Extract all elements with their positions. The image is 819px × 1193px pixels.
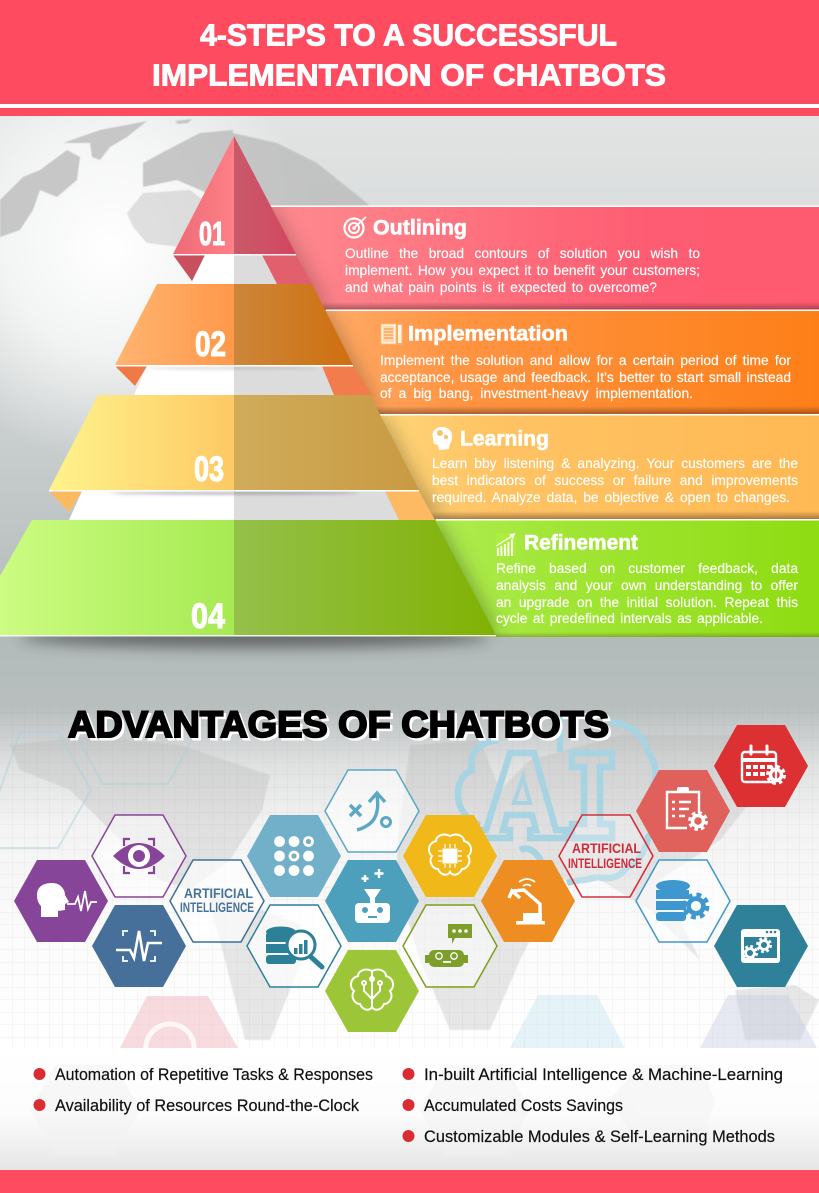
icon: artificial intelligence blue hexagon: INTELLIGENCE	[180, 899, 254, 915]
list item: Accumulated Costs Savings	[424, 1096, 623, 1115]
list item: Availability of Resources Round-the-Clock	[55, 1096, 359, 1115]
tier 03	[49, 395, 419, 492]
tier 02	[115, 284, 353, 366]
icon: data magnifier	[247, 905, 341, 987]
list item: In-built Artificial Intelligence & Machine-Learning	[424, 1065, 783, 1084]
panel: step 4 refinement	[390, 519, 819, 637]
list item: Automation of Repetitive Tasks & Responses	[55, 1065, 373, 1084]
heading: outlining: Outlining	[373, 216, 467, 240]
tier 01: 01	[199, 215, 225, 252]
chart: pyramid	[0, 136, 496, 648]
icon: artificial intelligence red hexagon: INTELLIGENCE	[568, 855, 642, 871]
icon: notebook and pencil	[380, 323, 403, 345]
icon: robot arm	[481, 860, 575, 942]
panel: step 1 outlining	[240, 206, 819, 310]
panel: advantages list	[0, 1048, 819, 1170]
title: 4-STEPS TO A SUCCESSFUL	[200, 18, 617, 52]
tier 04: 04	[191, 597, 225, 636]
text: refinement description: Refine based on customer feedback, data	[496, 561, 798, 576]
background: world map and grid section	[0, 640, 819, 1072]
icon: eye	[92, 815, 186, 897]
text: learning description: best indicators of success or failure and improvements	[432, 473, 798, 488]
text: refinement description: analysis and your own understanding to offer	[496, 578, 798, 593]
text: outlining description	[345, 245, 705, 300]
icon: strategy play	[325, 770, 419, 852]
list item: Customizable Modules & Self-Learning Methods	[424, 1127, 775, 1146]
heading: advantages of chatbots: ADVANTAGES OF CHATBOTS	[70, 706, 612, 748]
text: implementation description: Implement the solution and allow for a certain period of time for	[380, 353, 791, 368]
text: outlining description: Outline the broad contours of solution you wish to	[345, 246, 700, 261]
hexagon cluster	[14, 725, 808, 1032]
text: refinement description: an upgrade on the initial solution. Repeat this	[496, 594, 798, 610]
icon: artificial intelligence red hexagon	[559, 815, 653, 897]
text: implementation description: of a big bang, investment-heavy implementation.	[380, 386, 693, 401]
footer band	[0, 1170, 819, 1193]
panel: step 2 implementation	[290, 310, 819, 414]
text: refinement description: cycle at predefined intervals as applicable.	[496, 611, 763, 626]
text: learning description: Learn bby listening & analyzing. Your customers are the	[432, 456, 798, 471]
heading: implementation: Implementation	[408, 322, 568, 346]
ground shadow	[20, 626, 490, 648]
icon: artificial intelligence blue hexagon	[170, 860, 264, 942]
text: learning description: required. Analyze data, be objective & open to changes.	[432, 490, 790, 505]
title	[152, 18, 666, 92]
icon: green brain	[325, 950, 419, 1032]
icon: robot funnel	[325, 860, 419, 942]
heading: advantages of chatbots: ADVANTAGES OF CHATBOTS	[68, 703, 609, 745]
icon: artificial intelligence blue hexagon: ARTIFICIAL	[184, 885, 253, 901]
icon: speech head	[14, 860, 108, 942]
background: globe section	[0, 116, 819, 646]
header banner	[0, 0, 819, 116]
tier 03: 03	[194, 450, 224, 489]
text: refinement description	[496, 560, 801, 632]
tier 04	[0, 520, 496, 636]
text: outlining description: implement. How you expect it to benefit your customers;	[345, 263, 700, 278]
text: implementation description	[380, 352, 795, 407]
tier 02: 02	[195, 325, 226, 364]
text: implementation description: acceptance, usage and feedback. It’s better to start small instead	[380, 370, 791, 384]
icon: browser window with gears	[714, 905, 808, 987]
icon: clipboard and gear	[636, 770, 730, 852]
icon: waveform	[92, 905, 186, 987]
text: learning description	[432, 455, 802, 510]
icon: calendar and gear	[714, 725, 808, 807]
text: outlining description: and what pain points is it expected to overcome?	[345, 280, 657, 295]
icon: dot grid	[247, 815, 341, 897]
background: faded AI brain emblem	[458, 716, 656, 883]
tier 01	[173, 136, 296, 256]
heading: refinement: Refinement	[524, 532, 638, 554]
icon: growth chart	[496, 533, 516, 556]
icon: chip brain	[403, 815, 497, 897]
icon: target	[344, 217, 366, 238]
icon: chat robot	[403, 905, 497, 987]
icon: database and gear	[636, 860, 730, 942]
heading: learning: Learning	[460, 428, 549, 450]
title: IMPLEMENTATION OF CHATBOTS	[152, 58, 666, 92]
panel: step 3 learning	[340, 414, 819, 520]
icon: head with gears	[433, 427, 452, 450]
icon: artificial intelligence red hexagon: ARTIFICIAL	[572, 840, 641, 856]
